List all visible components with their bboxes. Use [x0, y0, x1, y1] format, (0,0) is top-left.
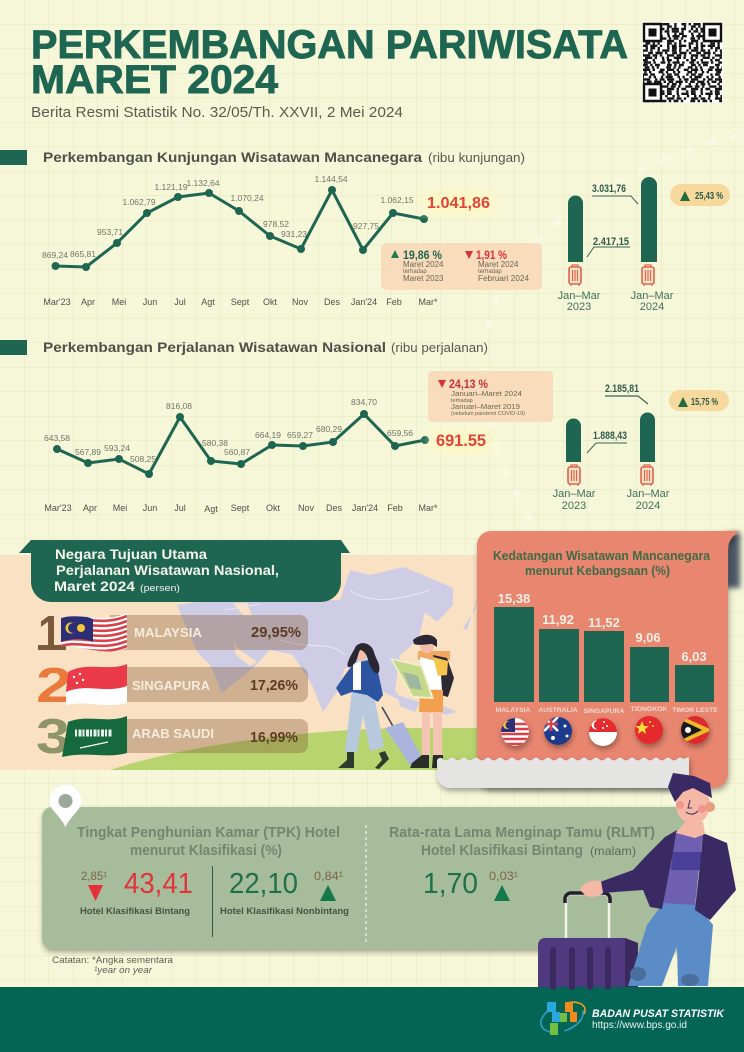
stat: starred hotels: 2,85¹ — [81, 869, 107, 883]
note: Catatan: *Angka sementara — [52, 955, 174, 966]
paper strip — [437, 757, 689, 788]
highlight value: 691.55 — [436, 431, 486, 450]
section marker — [0, 150, 27, 165]
bar chart: SINGAPURA — [584, 708, 624, 715]
line chart: domestic trips: Mar* — [418, 503, 438, 513]
callout: comparison with 2019: (sebelum pandemi COVID-19) — [451, 411, 525, 417]
panel: hotel statistics — [42, 785, 697, 949]
row: Arab Saudi: 16,99% — [250, 729, 298, 746]
bar chart: TIONGKOK — [631, 706, 667, 713]
heading: length of stay: Rata-rata Lama Menginap Tamu (RLMT) — [389, 824, 655, 841]
bar chart: 11,52 — [588, 615, 620, 630]
callout: comparison with 2019: 24,13 % — [449, 377, 488, 391]
stat: non-starred hotels: Hotel Klasifikasi Nonbintang — [220, 906, 349, 917]
heading: Perkembangan Kunjungan Wisatawan Mancanegara — [43, 149, 422, 165]
note: ¹year on year — [94, 965, 153, 976]
line chart: domestic trips: 643,58 — [44, 433, 70, 443]
heading: length of stay — [389, 824, 655, 859]
logo — [537, 998, 587, 1038]
bar pair: Jan-Mar totals: 1.888,43 — [593, 430, 627, 442]
callout: comparison with 2019: terhadap — [451, 398, 473, 404]
growth pill — [669, 390, 729, 411]
line chart: domestic trips: Mar'23 — [44, 503, 72, 513]
title: PERKEMBANGAN PARIWISATA — [31, 23, 628, 67]
stat: starred hotels: 43,41 — [124, 868, 193, 900]
callout: comparison with 2019: Januari–Maret 2024 — [451, 389, 522, 398]
title — [31, 23, 628, 102]
line chart: foreign visits: 927,75 — [353, 221, 379, 231]
jeans — [628, 903, 713, 986]
agency name: BADAN PUSAT STATISTIK — [592, 1008, 725, 1020]
line chart: domestic trips: 659,27 — [287, 430, 313, 440]
line chart: domestic trips: 659,56 — [387, 428, 413, 438]
row: Arab Saudi: ARAB SAUDI — [132, 727, 214, 741]
green hill — [110, 728, 480, 770]
line chart: domestic trips: 567,89 — [75, 447, 101, 457]
line chart: domestic trips: 664,19 — [255, 430, 281, 440]
row: Singapura — [36, 659, 308, 713]
section marker — [0, 340, 27, 355]
bar chart: 6,03 — [681, 649, 707, 664]
panel: foreign tourist visits — [0, 149, 730, 313]
banner heading: (persen) — [140, 583, 180, 593]
line chart: domestic trips: Des — [326, 503, 342, 513]
heading: length of stay: (malam) — [590, 844, 636, 858]
jacket — [600, 830, 677, 909]
line chart: foreign visits: 1.144,54 — [314, 174, 348, 184]
line chart: domestic trips: 680,29 — [316, 424, 342, 434]
note — [52, 955, 174, 976]
shirt — [663, 833, 703, 905]
line chart: domestic trips: Agt — [204, 504, 218, 514]
stat: length of stay: 1,70 — [423, 868, 478, 900]
bar pair: Jan-Mar totals: 2024 — [636, 500, 660, 512]
line chart: foreign visits: 978,52 — [263, 219, 289, 229]
line chart: foreign visits: 1.062,15 — [380, 195, 414, 205]
illustration: man with suitcase — [538, 773, 736, 987]
row: Malaysia: MALAYSIA — [134, 626, 202, 640]
icon: flag row — [500, 716, 712, 746]
line chart: foreign visits: Sept — [231, 297, 250, 307]
line chart: foreign visits: 869,24 — [42, 250, 68, 260]
callout: comparison with 2019: Januari–Maret 2019 — [451, 402, 520, 411]
line chart: domestic trips: Apr — [83, 503, 97, 513]
bar chart: 11,92 — [542, 612, 574, 627]
line chart: foreign visits: 931,23 — [281, 229, 307, 239]
bar pair: Jan-Mar totals: 3.031,76 — [592, 183, 626, 195]
bar pair: Jan-Mar totals: Jan–Mar — [631, 290, 674, 302]
line chart: foreign visits: Des — [324, 297, 340, 307]
line chart: foreign visits: Okt — [263, 297, 277, 307]
stat: non-starred hotels — [220, 868, 349, 917]
bar chart: 15,38 — [498, 591, 530, 606]
bar pair: Jan-Mar totals — [558, 177, 674, 313]
stat: length of stay — [423, 868, 518, 901]
callout: year on year and month on month: 1,91 % — [476, 248, 507, 262]
panel heading: Kedatangan Wisatawan Mancanegara — [493, 548, 711, 563]
icon: location pin — [50, 785, 82, 827]
stat: starred hotels — [80, 868, 193, 917]
neck and head — [676, 822, 705, 838]
bar pair: Jan-Mar totals: Jan–Mar — [627, 488, 670, 500]
heading: length of stay: Hotel Klasifikasi Bintang — [421, 842, 583, 859]
line chart: foreign visits: Agt — [201, 297, 215, 307]
callout: year on year and month on month: terhadap — [403, 269, 427, 275]
line chart: domestic trips: Mei — [113, 503, 127, 513]
highlight value: 1.041,86 — [427, 195, 490, 212]
callout: year on year and month on month: Februari 2024 — [478, 274, 530, 283]
illustration: man traveller — [390, 635, 454, 768]
line chart: domestic trips — [44, 397, 438, 514]
row: Malaysia: 29,95% — [251, 624, 301, 641]
banner heading: Negara Tujuan Utama — [55, 546, 207, 562]
banner heading: Maret 2024 — [54, 578, 135, 594]
heading: room occupancy: Tingkat Penghunian Kamar (TPK) Hotel — [77, 824, 340, 841]
line chart: foreign visits: 865,81 — [70, 249, 96, 259]
stat: starred hotels: Hotel Klasifikasi Bintang — [80, 906, 190, 917]
line chart: foreign visits: Mar'23 — [43, 297, 71, 307]
map of Asia — [177, 567, 478, 715]
bar pair: Jan-Mar totals: Jan–Mar — [553, 488, 596, 500]
unit note: (ribu kunjungan) — [428, 151, 525, 165]
growth pill: 25,43 % — [695, 190, 723, 202]
row: Malaysia: 1 — [38, 607, 62, 661]
bar pair: Jan-Mar totals — [553, 383, 670, 512]
callout: year on year and month on month: 19,86 % — [403, 248, 442, 262]
stat: non-starred hotels: 0,84¹ — [314, 869, 343, 883]
subtitle: Berita Resmi Statistik No. 32/05/Th. XXVII, 2 Mei 2024 — [31, 104, 403, 121]
panel: arrivals by nationality: menurut Kebangsaan (%) — [525, 563, 670, 578]
suitcase — [538, 893, 638, 987]
line chart: domestic trips: 560,87 — [224, 447, 250, 457]
panel: top destinations — [0, 540, 480, 770]
bar chart: MALAYSIA — [496, 707, 531, 714]
row: Singapura: 17,26% — [250, 677, 298, 694]
line chart: domestic trips: 834,70 — [351, 397, 377, 407]
row: Singapura: SINGAPURA — [132, 679, 210, 693]
banner heading — [19, 540, 350, 602]
callout: comparison with 2019 — [428, 371, 553, 422]
line chart: domestic trips: Jul — [174, 503, 186, 513]
row: Malaysia — [38, 613, 308, 652]
line chart: foreign visits: Mar* — [418, 297, 438, 307]
bar pair: Jan-Mar totals: 2023 — [567, 301, 591, 313]
line chart: domestic trips: 580,38 — [202, 438, 228, 448]
footer — [0, 987, 744, 1052]
bar chart: 9,06 — [635, 630, 661, 645]
callout: year on year and month on month: Maret 2023 — [403, 274, 444, 283]
unit note: (ribu perjalanan) — [391, 341, 488, 355]
bar chart: TIMOR LESTE — [672, 707, 718, 714]
hand — [580, 880, 603, 897]
line chart: foreign visits: Mei — [112, 297, 126, 307]
callout: year on year and month on month: Maret 2024 — [478, 260, 519, 269]
line chart: domestic trips: Feb — [387, 503, 403, 513]
line chart: foreign visits: Feb — [386, 297, 402, 307]
line chart: domestic trips: Jan'24 — [352, 503, 378, 513]
line chart: foreign visits: 1.121,19 — [154, 182, 188, 192]
line chart: foreign visits: 1.132,64 — [186, 178, 220, 188]
line chart: foreign visits: Nov — [292, 297, 308, 307]
callout: year on year and month on month: Maret 2024 — [403, 260, 444, 269]
line chart: domestic trips: 593,24 — [104, 443, 130, 453]
line chart: foreign visits: Jun — [143, 297, 157, 307]
panel: arrivals by nationality — [477, 531, 740, 788]
bar chart: AUSTRALIA — [538, 707, 578, 714]
banner heading: Perjalanan Wisatawan Nasional, — [56, 562, 279, 578]
line chart: foreign visits — [42, 174, 438, 307]
line chart: foreign visits: Jul — [174, 297, 186, 307]
line chart: foreign visits: Jan'24 — [351, 297, 377, 307]
line chart: foreign visits: 953,71 — [97, 227, 123, 237]
heading: room occupancy — [77, 824, 340, 859]
heading: Perkembangan Perjalanan Wisatawan Nasional — [43, 339, 386, 355]
line chart: domestic trips: Sept — [231, 503, 250, 513]
row: Arab Saudi — [36, 710, 308, 764]
line chart: domestic trips: Okt — [266, 503, 280, 513]
row: Arab Saudi: 3 — [36, 710, 70, 764]
line chart: domestic trips: Nov — [298, 503, 314, 513]
title: MARET 2024 — [31, 58, 279, 102]
growth pill: 15,75 % — [691, 396, 718, 408]
stat: length of stay: 0,03¹ — [489, 869, 518, 883]
bar pair: Jan-Mar totals: 2.185,81 — [605, 383, 639, 395]
line chart: domestic trips: 816,08 — [166, 401, 192, 411]
callout: year on year and month on month — [381, 243, 542, 290]
heading: room occupancy: menurut Klasifikasi (%) — [130, 842, 282, 859]
bar pair: Jan-Mar totals: 2.417,15 — [593, 236, 629, 248]
panel: domestic tourist trips — [0, 339, 729, 514]
illustration: woman traveller — [336, 643, 422, 769]
stat: non-starred hotels: 22,10 — [229, 868, 298, 900]
line chart: foreign visits: 1.062,79 — [122, 197, 156, 207]
bar pair: Jan-Mar totals: Jan–Mar — [558, 290, 601, 302]
agency url: https://www.bps.go.id — [592, 1019, 687, 1031]
bar pair: Jan-Mar totals: 2023 — [562, 500, 586, 512]
bar pair: Jan-Mar totals: 2024 — [640, 301, 664, 313]
line chart: domestic trips: 508,25 — [130, 454, 156, 464]
line chart: foreign visits: Apr — [81, 297, 95, 307]
callout: year on year and month on month: terhadap — [478, 269, 502, 275]
QR code — [642, 22, 723, 103]
row: Singapura: 2 — [36, 659, 72, 713]
growth pill — [670, 184, 730, 206]
line chart: domestic trips: Jun — [143, 503, 157, 513]
line chart: foreign visits: 1.070,24 — [230, 193, 264, 203]
bar chart — [494, 591, 718, 715]
